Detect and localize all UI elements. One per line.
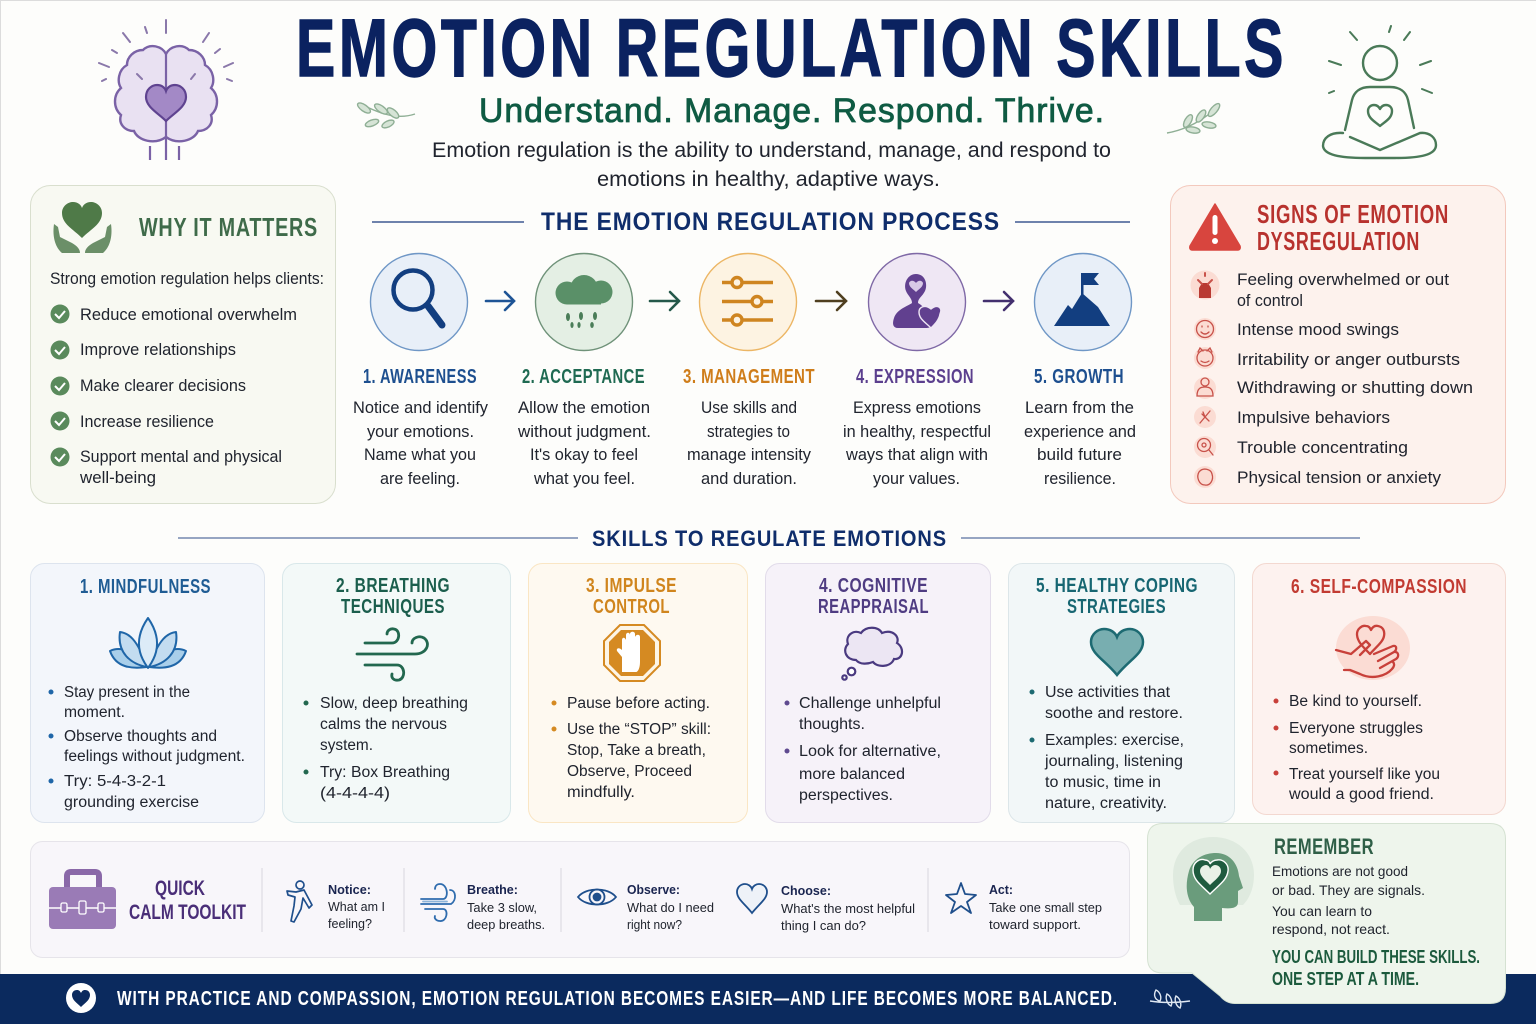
message (1272, 863, 1425, 937)
toolkit: choose: What's the most helpful (781, 901, 915, 916)
toolkit: act (946, 882, 1102, 932)
icon: left leaf sprig (356, 101, 415, 129)
toolkit: notice: What am I (328, 899, 385, 914)
bullets (554, 695, 711, 801)
card 1: mindfulness (30, 564, 264, 822)
description: strategies to (707, 422, 790, 441)
label: 4. EXPRESSION (856, 366, 974, 388)
check list (50, 304, 297, 487)
toolkit: breathe (421, 882, 545, 932)
arrow 2 (650, 292, 679, 310)
icon: heart badge (66, 983, 96, 1013)
list of signs: Withdrawing or shutting down (1237, 378, 1473, 397)
toolkit: notice (287, 881, 385, 931)
icon: right leaf sprig (1167, 102, 1222, 134)
description: are feeling. (380, 469, 460, 488)
toolkit: breathe: Breathe: (467, 882, 518, 897)
card title: CONTROL (593, 596, 670, 618)
arrow 3 (816, 292, 846, 310)
icon: heart in hands (53, 202, 112, 253)
bullets: Be kind to yourself. (1289, 693, 1422, 710)
panel: why it matters (30, 186, 336, 504)
step 4: expression (843, 254, 991, 488)
panel: quick calm toolkit (30, 842, 1130, 958)
card title: 1. MINDFULNESS (80, 576, 211, 598)
description: Learn from the (1025, 398, 1134, 417)
icon: lotus (110, 618, 186, 668)
icon: meditating figure (1323, 26, 1436, 158)
description: Express emotions (853, 398, 981, 417)
heading: process: THE EMOTION REGULATION PROCESS (541, 208, 1000, 236)
label: 1. AWARENESS (363, 366, 477, 388)
icon: wind (357, 629, 427, 680)
check list: Make clearer decisions (80, 376, 246, 395)
bullets: more balanced (799, 766, 905, 783)
bullets (1276, 693, 1440, 803)
subtitle: Understand. Manage. Respond. Thrive. (479, 92, 1105, 130)
toolkit: observe (578, 882, 714, 932)
check list: well-being (79, 468, 156, 487)
toolkit: observe: right now? (627, 917, 682, 932)
banner message: WITH PRACTICE AND COMPASSION, EMOTION REGULATION BECOMES EASIER—AND LIFE BECOMES MORE BALANCED. (117, 988, 1118, 1010)
icon: person with heart (893, 274, 941, 328)
icon: hands holding heart (1336, 616, 1410, 680)
description: ways that align with (845, 445, 988, 464)
description: It's okay to feel (530, 445, 638, 464)
bullets: journaling, listening (1044, 753, 1183, 770)
card 6: self-compassion (1252, 564, 1506, 814)
description: manage intensity (687, 445, 811, 464)
lead text: Strong emotion regulation helps clients: (50, 269, 324, 288)
toolkit: choose: Choose: (781, 883, 831, 898)
card title: TECHNIQUES (341, 596, 445, 618)
toolkit: choose: thing I can do? (781, 918, 866, 933)
card title (1036, 575, 1198, 618)
icon: brain with heart (99, 20, 233, 160)
icon: toolbox (49, 872, 116, 929)
bullets (787, 695, 941, 804)
bullets: nature, creativity. (1045, 795, 1167, 812)
intro text: emotions in healthy, adaptive ways. (597, 167, 940, 191)
heading: REMEMBER (1274, 834, 1374, 859)
bullets: Use activities that (1045, 684, 1171, 701)
description (843, 398, 991, 488)
heading: skills: SKILLS TO REGULATE EMOTIONS (592, 526, 947, 551)
bullets: sometimes. (1289, 740, 1368, 757)
bullets: Try: Box Breathing (320, 764, 450, 781)
description: and duration. (701, 469, 797, 488)
icon: mountain and flag (1054, 273, 1110, 326)
call to action: ONE STEP AT A TIME. (1272, 968, 1419, 989)
panel: signs of dysregulation (1170, 186, 1506, 504)
description: Name what you (364, 445, 476, 464)
list of signs: Physical tension or anxiety (1237, 468, 1441, 487)
bullets: perspectives. (799, 787, 893, 804)
icon: teal heart (1091, 629, 1143, 675)
list of signs (1237, 270, 1473, 487)
message: or bad. They are signals. (1272, 882, 1425, 898)
icon: stop hand (604, 625, 660, 681)
step 5: growth (1024, 254, 1136, 488)
description (1024, 398, 1136, 488)
bullets: to music, time in (1045, 774, 1161, 791)
card title (336, 575, 450, 618)
list of signs: Irritability or anger outbursts (1237, 350, 1460, 369)
toolkit: breathe: Take 3 slow, (467, 900, 537, 915)
bullets: Pause before acting. (567, 695, 710, 712)
description (687, 398, 811, 488)
list of signs: Intense mood swings (1237, 320, 1399, 339)
bullets: Stop, Take a breath, (567, 742, 706, 759)
toolkit: act: Take one small step (989, 900, 1102, 915)
bullets: Use the “STOP” skill: (567, 721, 711, 738)
toolkit heading: CALM TOOLKIT (129, 901, 246, 924)
label: 2. ACCEPTANCE (522, 366, 645, 388)
bullets: would a good friend. (1288, 786, 1434, 803)
description: experience and (1024, 422, 1136, 441)
message: respond, not react. (1272, 921, 1390, 937)
intro text: Emotion regulation is the ability to understand, manage, and respond to (432, 138, 1111, 162)
label: 5. GROWTH (1034, 366, 1124, 388)
card title: 4. COGNITIVE (819, 575, 928, 597)
bullets: feelings without judgment. (64, 748, 245, 765)
card title: 6. SELF-COMPASSION (1291, 576, 1467, 598)
card 5: healthy coping strategies (1008, 564, 1234, 822)
card title (586, 575, 677, 618)
description: what you feel. (533, 469, 635, 488)
heading: why it matters: WHY IT MATTERS (139, 212, 318, 242)
bullets: soothe and restore. (1045, 705, 1183, 722)
message: Emotions are not good (1272, 863, 1408, 879)
icon: thought cloud (842, 628, 902, 680)
icon: head with heart (1173, 837, 1254, 921)
card title: REAPPRAISAL (818, 596, 929, 618)
bullets: Observe thoughts and (64, 728, 217, 745)
description: build future (1037, 445, 1122, 464)
toolkit: notice: feeling? (328, 916, 372, 931)
arrow 1 (486, 292, 514, 310)
icons: sign symbols (1190, 270, 1220, 488)
step 1: awareness (353, 254, 488, 488)
list of signs: of control (1237, 291, 1303, 310)
description: resilience. (1044, 469, 1116, 488)
bullets: thoughts. (799, 716, 865, 733)
description: Notice and identify (353, 398, 488, 417)
check list: Reduce emotional overwhelm (80, 305, 297, 324)
bullets: system. (320, 737, 373, 754)
bullets: Observe, Proceed (567, 763, 692, 780)
card title (818, 575, 929, 618)
list of signs: Trouble concentrating (1237, 438, 1408, 457)
label: 3. MANAGEMENT (683, 366, 815, 388)
check list: Improve relationships (80, 340, 236, 359)
bullets: calms the nervous (320, 716, 447, 733)
bullets: (4-4-4-4) (320, 785, 390, 802)
bullets: grounding exercise (64, 794, 199, 811)
bullets: Stay present in the (64, 684, 190, 701)
description (353, 398, 488, 488)
description: Use skills and (701, 398, 797, 417)
step 2: acceptance (517, 254, 651, 488)
bullets: moment. (64, 704, 125, 721)
toolkit heading: QUICK (155, 877, 205, 900)
icon: rain cloud (556, 275, 612, 328)
bullets (51, 684, 245, 811)
description: your values. (873, 469, 960, 488)
toolkit: act: toward support. (989, 917, 1081, 932)
heading: DYSREGULATION (1257, 226, 1420, 256)
description: in healthy, respectful (843, 422, 991, 441)
bullets: Everyone struggles (1289, 720, 1423, 737)
message: You can learn to (1272, 903, 1372, 919)
list of signs: Impulsive behaviors (1237, 408, 1390, 427)
card title: 2. BREATHING (336, 575, 450, 597)
description: Allow the emotion (518, 398, 650, 417)
check list: Support mental and physical (80, 447, 282, 466)
toolkit: observe: What do I need (627, 900, 714, 915)
card title: 5. HEALTHY COPING (1036, 575, 1198, 597)
intro text (432, 138, 1111, 191)
bullets (1032, 684, 1184, 812)
call to action (1272, 946, 1480, 989)
bullets: Treat yourself like you (1289, 766, 1440, 783)
card 2: breathing techniques (282, 564, 510, 822)
bullets (306, 695, 468, 802)
bullets: Examples: exercise, (1045, 732, 1184, 749)
description: your emotions. (367, 422, 474, 441)
step 3: management (683, 254, 815, 488)
icon: warning triangle (1190, 204, 1240, 250)
heading: SIGNS OF EMOTION (1257, 199, 1449, 229)
toolkit: notice: Notice: (328, 882, 371, 897)
heading (1257, 199, 1449, 256)
bottom banner (0, 974, 1536, 1024)
icon: sliders (722, 278, 773, 325)
bullets: Try: 5-4-3-2-1 (64, 773, 166, 790)
bullets: Slow, deep breathing (320, 695, 468, 712)
card 4: cognitive reappraisal (766, 564, 990, 822)
toolkit: breathe: deep breaths. (467, 917, 545, 932)
card title: STRATEGIES (1067, 596, 1166, 618)
bullets: mindfully. (567, 784, 635, 801)
bullets: Challenge unhelpful (799, 695, 941, 712)
description (517, 398, 651, 488)
arrow 4 (984, 292, 1013, 310)
description: without judgment. (517, 422, 651, 441)
toolkit: observe: Observe: (627, 882, 680, 897)
check list: Increase resilience (80, 412, 214, 431)
toolkit: choose (737, 883, 915, 933)
toolkit heading (129, 877, 246, 924)
card title: 3. IMPULSE (586, 575, 677, 597)
icon: magnifier (394, 270, 442, 325)
icon: banner sprig (1150, 990, 1190, 1008)
card 3: impulse control (528, 564, 748, 822)
list of signs: Feeling overwhelmed or out (1237, 270, 1449, 289)
panel: remember (1148, 824, 1506, 1004)
toolkit: act: Act: (989, 882, 1013, 897)
bullets: Look for alternative, (799, 743, 941, 760)
